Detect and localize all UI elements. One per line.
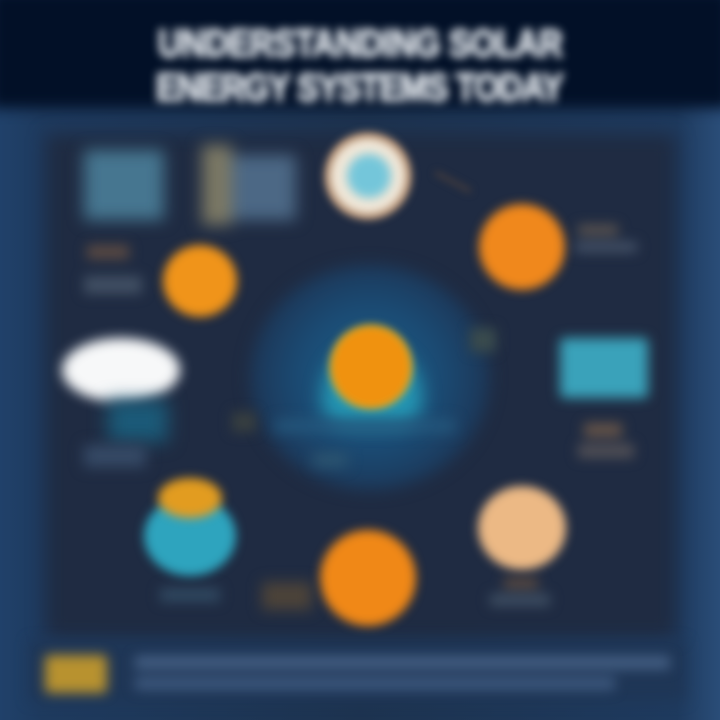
icon: left orange circle [163, 245, 237, 317]
label: left upper [80, 239, 146, 298]
icon: bottom left teal globe [138, 470, 242, 582]
connector [232, 412, 256, 432]
teal dome [322, 346, 422, 426]
icon: white cloud [62, 338, 180, 402]
ring inner [331, 139, 405, 213]
title [150, 21, 570, 109]
label: right [574, 416, 638, 464]
footer band [30, 642, 685, 700]
central label [274, 412, 454, 469]
connector [436, 171, 470, 193]
cap [158, 478, 222, 518]
title: UNDERSTANDING SOLAR [158, 21, 562, 65]
icon: bottom right peach circle [478, 486, 566, 570]
icon: top right orange circle [479, 204, 565, 290]
icon: central sun with teal dome [312, 318, 432, 434]
top left cards [74, 135, 304, 235]
header band [0, 0, 720, 108]
central glow [250, 265, 490, 490]
icon: cloud rain [108, 400, 168, 442]
icon: bottom orange circle [320, 530, 416, 626]
label: bottom centre [262, 582, 312, 610]
icon: top ring sun [318, 126, 418, 226]
footer text [131, 651, 674, 695]
core [347, 154, 391, 198]
globe [144, 496, 236, 576]
icon: right teal panel [560, 338, 648, 398]
label: bottom right [488, 574, 552, 610]
label: left mid [84, 445, 146, 467]
sun disc [329, 324, 413, 410]
connector [470, 328, 496, 352]
title: ENERGY SYSTEMS TODAY [156, 65, 563, 109]
label: bottom left [160, 588, 220, 602]
label: top right [573, 218, 640, 256]
ring outer [324, 132, 412, 220]
icon: footer badge [45, 655, 107, 693]
main panel [46, 134, 676, 638]
